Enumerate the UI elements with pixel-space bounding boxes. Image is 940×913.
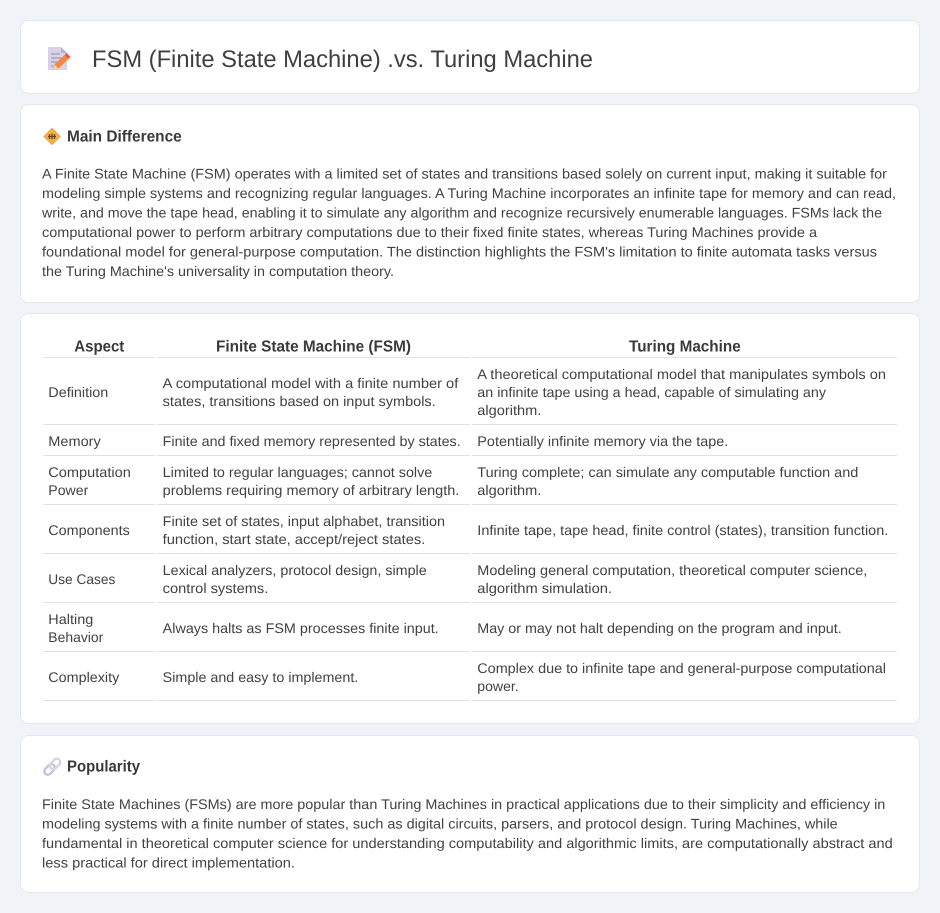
row: complexity: Complexity [48, 669, 119, 685]
row: computation power: Limited to regular languages; cannot solve [163, 464, 433, 480]
row: components [43, 513, 897, 554]
row: complexity: power. [477, 678, 519, 694]
row: complexity: Simple and easy to implement. [163, 669, 358, 685]
heading: popularity: Popularity [67, 759, 140, 776]
row: use cases: Lexical analyzers, protocol design, simple [163, 562, 427, 578]
row: definition: states, transitions based on input symbols. [163, 393, 436, 409]
row: memory: Memory [48, 433, 101, 449]
row: components: function, start state, accept/reject states. [163, 531, 425, 547]
table header row: Turing Machine [629, 339, 741, 356]
icon: memo with pencil [48, 47, 70, 70]
table header row: Finite State Machine (FSM) [216, 339, 411, 356]
text block: main difference paragraph [41, 165, 896, 279]
row: components: Components [48, 522, 130, 538]
text block: popularity paragraph: Finite State Machines (FSMs) are more popular than Turing Machines in practical applications due to their simplicity and efficiency in [42, 796, 885, 812]
text block: popularity paragraph: fundamental in theoretical computer science for understanding computability and algorithmic limits, are computationally abstract and [42, 835, 893, 851]
row: components: Infinite tape, tape head, finite control (states), transition function. [477, 522, 888, 538]
row: halting behavior [43, 611, 897, 652]
row: definition [43, 366, 897, 424]
row: computation power: Turing complete; can simulate any computable function and [477, 464, 858, 480]
table header row [43, 339, 897, 358]
row: memory: Finite and fixed memory represented by states. [163, 433, 461, 449]
row: computation power: Computation [48, 464, 131, 480]
text block: main difference paragraph: computational power to perform arbitrary computations due to their fixed finite states, whereas Turing Machines provide a [42, 224, 817, 240]
panel: main difference [20, 104, 920, 302]
row: definition: an infinite tape using a head, capable of simulating any [477, 384, 826, 400]
text block: main difference paragraph: the Turing Machine's universality in computation theory. [42, 263, 394, 279]
row: halting behavior: Behavior [48, 629, 104, 645]
row: definition: algorithm. [477, 402, 541, 418]
row: computation power: problems requiring memory of arbitrary length. [163, 482, 459, 498]
text block: popularity paragraph: less practical for direct implementation. [42, 854, 295, 870]
icon: orange diamond sign [44, 128, 60, 144]
text block: main difference paragraph: foundational model for general-purpose computation. The distinction highlights the FSM's limitation to finite automata tasks versus [42, 244, 877, 260]
row: complexity [43, 660, 897, 700]
row: memory [43, 433, 897, 456]
text block: main difference paragraph: write, and move the tape head, enabling it to simulate any algorithm and recognize recursively enumerable languages. FSMs lack the [41, 204, 882, 220]
row: use cases [43, 562, 897, 602]
row: computation power: Power [48, 482, 89, 498]
row: use cases: Modeling general computation, theoretical computer science, [477, 562, 867, 578]
row: components: Finite set of states, input alphabet, transition [163, 513, 445, 529]
text block: popularity paragraph: modeling systems with a finite number of states, such as digital circuits, parsers, and protocol design. Turing Machines, while [42, 815, 838, 831]
text block: popularity paragraph [42, 796, 893, 870]
row: definition: A theoretical computational model that manipulates symbols on [477, 366, 886, 382]
row: halting behavior: Always halts as FSM processes finite input. [163, 620, 439, 636]
title: FSM (Finite State Machine) .vs. Turing Machine [92, 46, 593, 73]
heading: main difference: Main Difference [67, 129, 182, 146]
panel: comparison table [20, 314, 920, 724]
row: use cases: Use Cases [48, 571, 115, 587]
panel: title header [20, 20, 920, 94]
row: use cases: control systems. [163, 580, 268, 596]
row: complexity: Complex due to infinite tape and general-purpose computational [477, 660, 886, 676]
row: computation power: algorithm. [477, 482, 541, 498]
text block: main difference paragraph: A Finite State Machine (FSM) operates with a limited set of states and transitions based solely on current input, making it suitable for [42, 165, 887, 181]
row: halting behavior: May or may not halt depending on the program and input. [477, 620, 842, 636]
text block: main difference paragraph: modeling simple systems and recognizing regular languages. A Turing Machine incorporates an infinite tape for memory and can read, [42, 185, 896, 201]
icon: link [43, 757, 62, 776]
row: memory: Potentially infinite memory via the tape. [477, 433, 728, 449]
panel: popularity [20, 736, 920, 892]
row: definition: A computational model with a finite number of [163, 375, 458, 391]
row: halting behavior: Halting [48, 611, 93, 627]
row: computation power [43, 464, 897, 504]
row: definition: Definition [48, 384, 108, 400]
row: use cases: algorithm simulation. [477, 580, 612, 596]
table header row: Aspect [74, 339, 125, 356]
